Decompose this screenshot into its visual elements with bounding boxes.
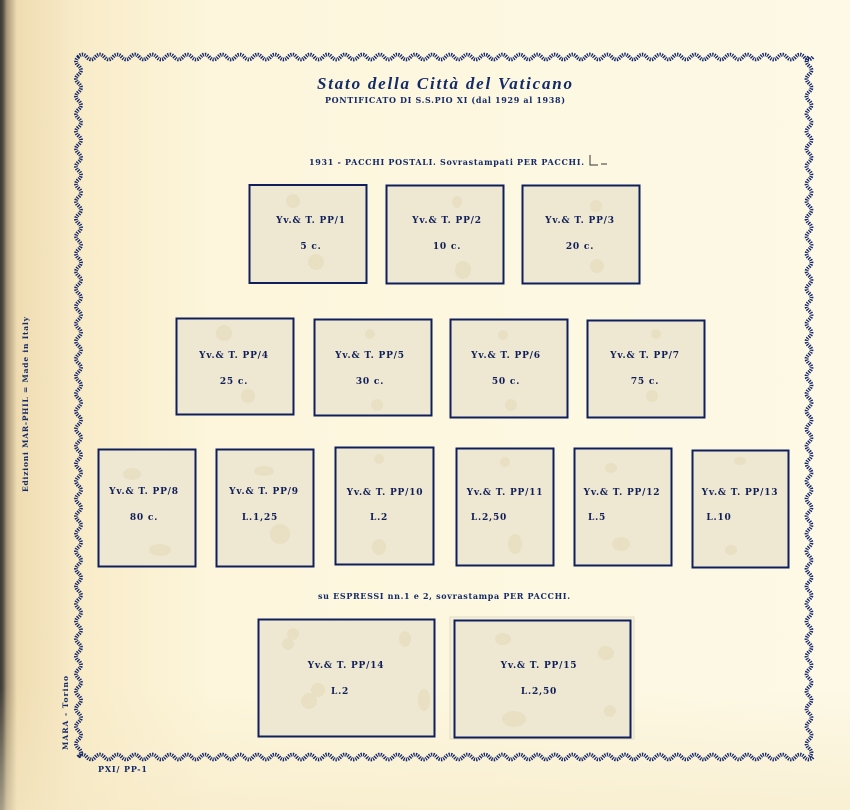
stamp PP/4: 25 c.: [220, 377, 248, 387]
stamp PP/5: [314, 320, 432, 416]
stamp PP/7: [588, 320, 704, 418]
stamp PP/15: L.2,50: [521, 687, 557, 697]
stamp PP/10: L.2: [370, 513, 388, 523]
page code: PXI/ PP-1: [98, 764, 147, 774]
stamp PP/14: L.2: [331, 687, 349, 697]
stamp PP/1: 5 c.: [300, 242, 322, 252]
stamp PP/2: [386, 186, 504, 284]
section heading: espressi: su ESPRESSI nn.1 e 2, sovrastampa PER PACCHI.: [318, 591, 570, 601]
subtitle: PONTIFICATO DI S.S.PIO XI (dal 1929 al 1938): [325, 95, 565, 105]
stamp PP/15: [450, 617, 634, 739]
stamp PP/9: Yv.& T. PP/9: [228, 487, 299, 497]
stamp PP/5: Yv.& T. PP/5: [334, 351, 405, 361]
stamp PP/3: [522, 186, 640, 284]
stamp PP/1: [250, 185, 366, 283]
stamp PP/2: Yv.& T. PP/2: [411, 216, 482, 226]
stamp PP/11: [456, 448, 554, 566]
stamp PP/4: [176, 318, 294, 414]
stamp PP/10: [336, 448, 434, 564]
side label: printer: MARA - Torino: [61, 676, 70, 750]
stamp PP/12: Yv.& T. PP/12: [583, 488, 660, 498]
stamp PP/8: 80 c.: [130, 513, 158, 523]
handwritten mark: [590, 155, 607, 165]
stamp PP/13: L.10: [706, 513, 732, 523]
stamp PP/11: L.2,50: [471, 513, 507, 523]
stamp PP/7: 75 c.: [631, 377, 659, 387]
stamp PP/8: Yv.& T. PP/8: [108, 487, 179, 497]
stamp PP/15: Yv.& T. PP/15: [500, 661, 577, 671]
stamp PP/14: Yv.& T. PP/14: [307, 661, 384, 671]
stamp PP/6: Yv.& T. PP/6: [470, 351, 541, 361]
stamp PP/3: 20 c.: [566, 242, 594, 252]
stamp PP/9: [216, 450, 314, 566]
stamp PP/13: Yv.& T. PP/13: [701, 488, 778, 498]
stamp PP/4: Yv.& T. PP/4: [198, 351, 269, 361]
stamp PP/10: Yv.& T. PP/10: [346, 488, 423, 498]
stamp PP/7: Yv.& T. PP/7: [609, 351, 680, 361]
stamp PP/6: [450, 320, 568, 418]
decorative wavy frame: [76, 54, 813, 760]
stamp PP/3: Yv.& T. PP/3: [544, 216, 615, 226]
stamp PP/14: [258, 620, 434, 736]
stamp PP/11: Yv.& T. PP/11: [466, 488, 543, 498]
stamp PP/1: Yv.& T. PP/1: [275, 216, 346, 226]
section heading: 1931: 1931 - PACCHI POSTALI. Sovrastampati PER PACCHI.: [309, 157, 584, 167]
title: Stato della Città del Vaticano: [317, 74, 572, 93]
stamp PP/6: 50 c.: [492, 377, 520, 387]
side label: publisher: Edizioni MAR-PHIL = Made in Italy: [21, 316, 30, 492]
stamp PP/5: 30 c.: [356, 377, 384, 387]
stamp PP/13: [692, 450, 788, 568]
stamp PP/9: L.1,25: [242, 513, 278, 523]
stamp PP/12: [574, 448, 672, 566]
stamp PP/2: 10 c.: [433, 242, 461, 252]
stamp PP/8: [98, 450, 196, 566]
stamp PP/12: L.5: [588, 513, 606, 523]
